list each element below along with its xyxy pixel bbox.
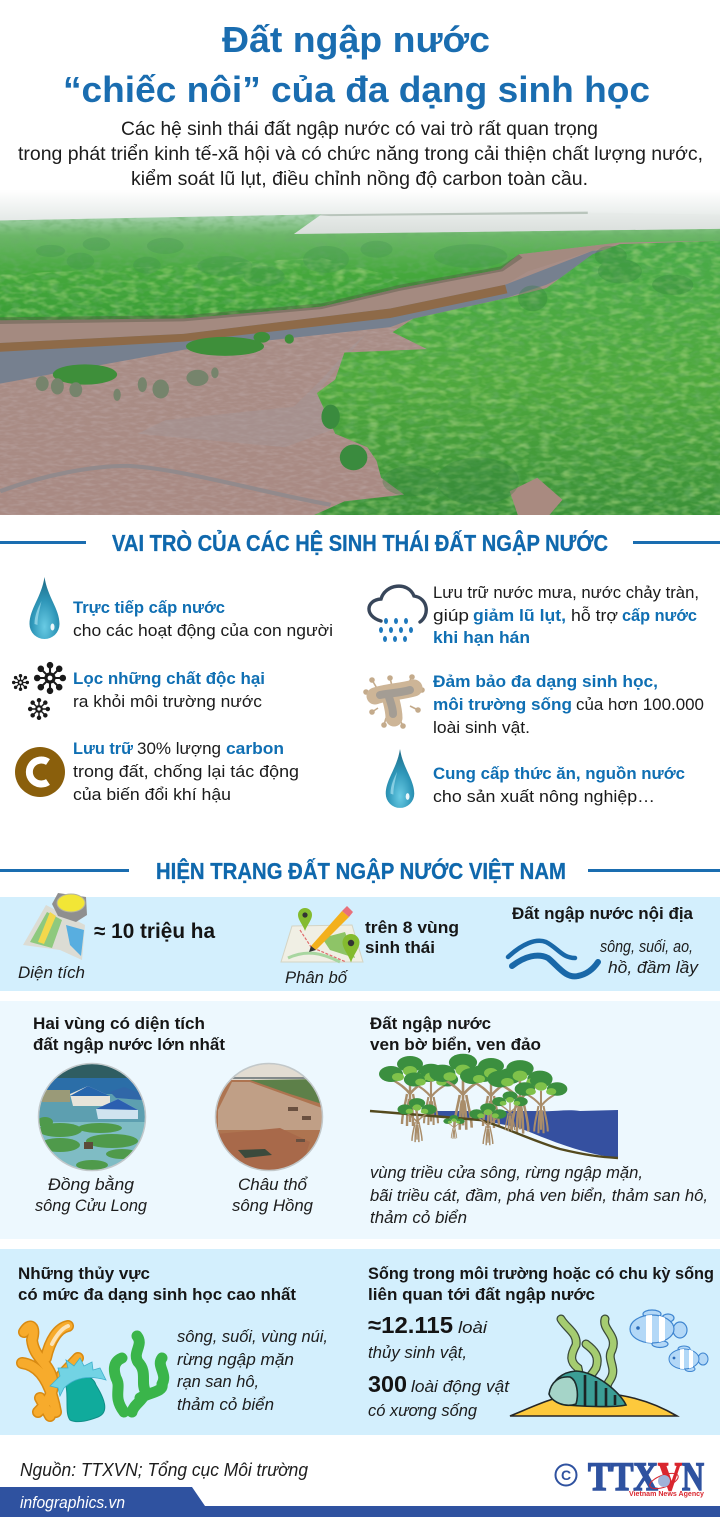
label: distribution: Phân bố [285, 968, 349, 987]
label: Mekong delta: sông Cửu Long [35, 1196, 148, 1215]
heading: species [368, 1264, 714, 1304]
title: Đất ngập nước [222, 19, 490, 60]
label: area: Diện tích [18, 963, 85, 982]
intro text: trong phát triển kinh tế-xã hội và có chức năng trong cải thiện chất lượng nước, [18, 144, 703, 165]
text: carbon storage: trong đất, chống lại tác động [73, 762, 299, 781]
text: basin list: rạn san hô, [177, 1372, 259, 1391]
illustration: mangrove cross-section [370, 1054, 618, 1158]
text: biodiversity [433, 672, 704, 737]
photo: Red River delta [215, 1063, 323, 1172]
text: food and water: cho sản xuất nông nghiệp… [433, 787, 655, 806]
text: species numbers: ≈12.115 [368, 1312, 453, 1338]
text: flood and drought: giúp [433, 606, 469, 625]
text: coastal wetlands list: thảm cỏ biển [370, 1208, 467, 1227]
heading: coastal wetlands: ven bờ biển, ven đảo [370, 1035, 541, 1054]
heading: current status [0, 857, 720, 884]
text: coastal wetlands list: bãi triều cát, đầm, phá ven biển, thảm san hô, [370, 1186, 708, 1205]
text: biodiversity: Đảm bảo đa dạng sinh học, [433, 672, 658, 691]
text: filter toxins: ra khỏi môi trường nước [73, 692, 262, 711]
icon: rain cloud [369, 586, 426, 642]
footer site name: infographics.vn [20, 1493, 125, 1512]
label: Mekong delta [35, 1175, 148, 1215]
text: direct water supply [73, 598, 333, 640]
logo: TTXVN: Vietnam News Agency [629, 1489, 705, 1498]
heading: basins: có mức đa dạng sinh học cao nhất [18, 1285, 296, 1304]
text: flood and drought: cấp nước [622, 606, 697, 625]
text: direct water supply: cho các hoạt động của con người [73, 621, 333, 640]
text: basin list [177, 1327, 328, 1414]
panel: biodiversity basins and species [0, 1249, 720, 1435]
text: inland wetlands list [600, 937, 700, 977]
heading: coastal wetlands [370, 1014, 541, 1054]
label: Mekong delta: Đồng bằng [48, 1175, 135, 1194]
text: direct water supply: Trực tiếp cấp nước [73, 598, 225, 617]
icon: water drop [30, 577, 60, 639]
text: species numbers: có xương sống [368, 1401, 478, 1420]
intro text [18, 119, 703, 190]
logo: TTXVN: N [682, 1454, 704, 1499]
label: Red River delta: Châu thổ [238, 1175, 309, 1194]
logo: TTXVN: C [561, 1467, 571, 1483]
text: inland wetlands heading: Đất ngập nước nội địa [512, 904, 694, 923]
text: flood and drought: hỗ trợ [571, 606, 618, 625]
text: flood and drought: Lưu trữ nước mưa, nước chảy tràn, [433, 583, 699, 602]
icon: waves [508, 941, 598, 976]
text: eight regions: trên 8 vùng [365, 918, 459, 937]
title: “chiếc nôi” của đa dạng sinh học [63, 69, 650, 110]
text: species numbers: thủy sinh vật, [368, 1343, 467, 1362]
text: species numbers: loài động vật [411, 1377, 510, 1396]
text: area: ≈ 10 triệu ha [94, 920, 215, 943]
text: food and water [433, 764, 685, 806]
icon: toxins [13, 663, 65, 719]
text: basin list: thảm cỏ biển [177, 1395, 274, 1414]
text: carbon storage: của biến đổi khí hậu [73, 785, 231, 804]
text: flood and drought: giảm lũ lụt, [473, 606, 566, 625]
heading: species: liên quan tới đất ngập nước [368, 1285, 595, 1304]
title [63, 19, 650, 110]
heading: basins [18, 1264, 296, 1304]
heading: two largest regions [33, 1014, 225, 1054]
heading: basins: Những thủy vực [18, 1264, 150, 1283]
label: Red River delta: sông Hồng [232, 1196, 314, 1215]
label: Red River delta [232, 1175, 314, 1215]
source: Nguồn: TTXVN; Tổng cục Môi trường [20, 1460, 308, 1480]
logo: TTXVN: V [658, 1454, 682, 1499]
text: carbon storage: carbon [226, 739, 284, 758]
footer band [0, 1487, 720, 1517]
heading: current status: HIỆN TRẠNG ĐẤT NGẬP NƯỚC VIỆT NAM [156, 857, 566, 884]
text: species numbers: loài [458, 1318, 488, 1337]
text: basin list: sông, suối, vùng núi, [177, 1327, 328, 1346]
illustration: shell, kelp and fish [510, 1310, 708, 1416]
panel: area, distribution, inland [0, 893, 720, 991]
text: flood and drought: khi hạn hán [433, 628, 530, 647]
white band under photo [0, 515, 720, 527]
text: species numbers: 300 [368, 1371, 407, 1397]
heading: species: Sống trong môi trường hoặc có chu kỳ sống [368, 1264, 714, 1283]
panel: largest regions and coastal wetlands [0, 1001, 720, 1239]
text: eight regions [365, 918, 459, 957]
icon: carbon [15, 747, 65, 797]
text: coastal wetlands list: vùng triều cửa sông, rừng ngập mặn, [370, 1163, 643, 1182]
text: carbon storage: 30% lượng [137, 739, 221, 758]
text: filter toxins [73, 669, 265, 711]
photo: Mekong delta [37, 1063, 146, 1172]
text: filter toxins: Lọc những chất độc hại [73, 669, 265, 688]
icon: distribution map [281, 906, 363, 962]
icon: area map [23, 893, 87, 960]
text: eight regions: sinh thái [365, 938, 435, 957]
illustration: coral and seaweed [22, 1326, 164, 1422]
heading: two largest regions: Hai vùng có diện tích [33, 1014, 205, 1033]
heading: coastal wetlands: Đất ngập nước [370, 1014, 491, 1033]
text: flood and drought [433, 583, 699, 647]
text: inland wetlands list: hồ, đầm lầy [608, 958, 700, 977]
icon: biodiversity cell [364, 675, 424, 728]
text: biodiversity: môi trường sống [433, 695, 572, 714]
intro text: kiểm soát lũ lụt, điều chỉnh nồng độ carbon toàn cầu. [131, 169, 588, 190]
heading: roles: VAI TRÒ CỦA CÁC HỆ SINH THÁI ĐẤT NGẬP NƯỚC [112, 528, 608, 556]
text: coastal wetlands list [370, 1163, 708, 1227]
heading: two largest regions: đất ngập nước lớn nhất [33, 1035, 225, 1054]
text: basin list: rừng ngập mặn [177, 1350, 294, 1369]
logo: TTXVN [556, 1454, 705, 1499]
intro text: Các hệ sinh thái đất ngập nước có vai trò rất quan trọng [121, 119, 598, 140]
photo: mangrove wetland [0, 190, 720, 520]
text: biodiversity: của hơn 100.000 [576, 695, 704, 714]
text: inland wetlands list: sông, suối, ao, [600, 937, 693, 956]
text: carbon storage: Lưu trữ [73, 739, 134, 758]
text: biodiversity: loài sinh vật. [433, 718, 530, 737]
logo: TTXVN: TTX [588, 1454, 658, 1499]
text: carbon storage [73, 739, 299, 804]
text: food and water: Cung cấp thức ăn, nguồn nước [433, 764, 685, 783]
icon: water drop 2 [386, 749, 414, 808]
text: species numbers [368, 1312, 510, 1420]
